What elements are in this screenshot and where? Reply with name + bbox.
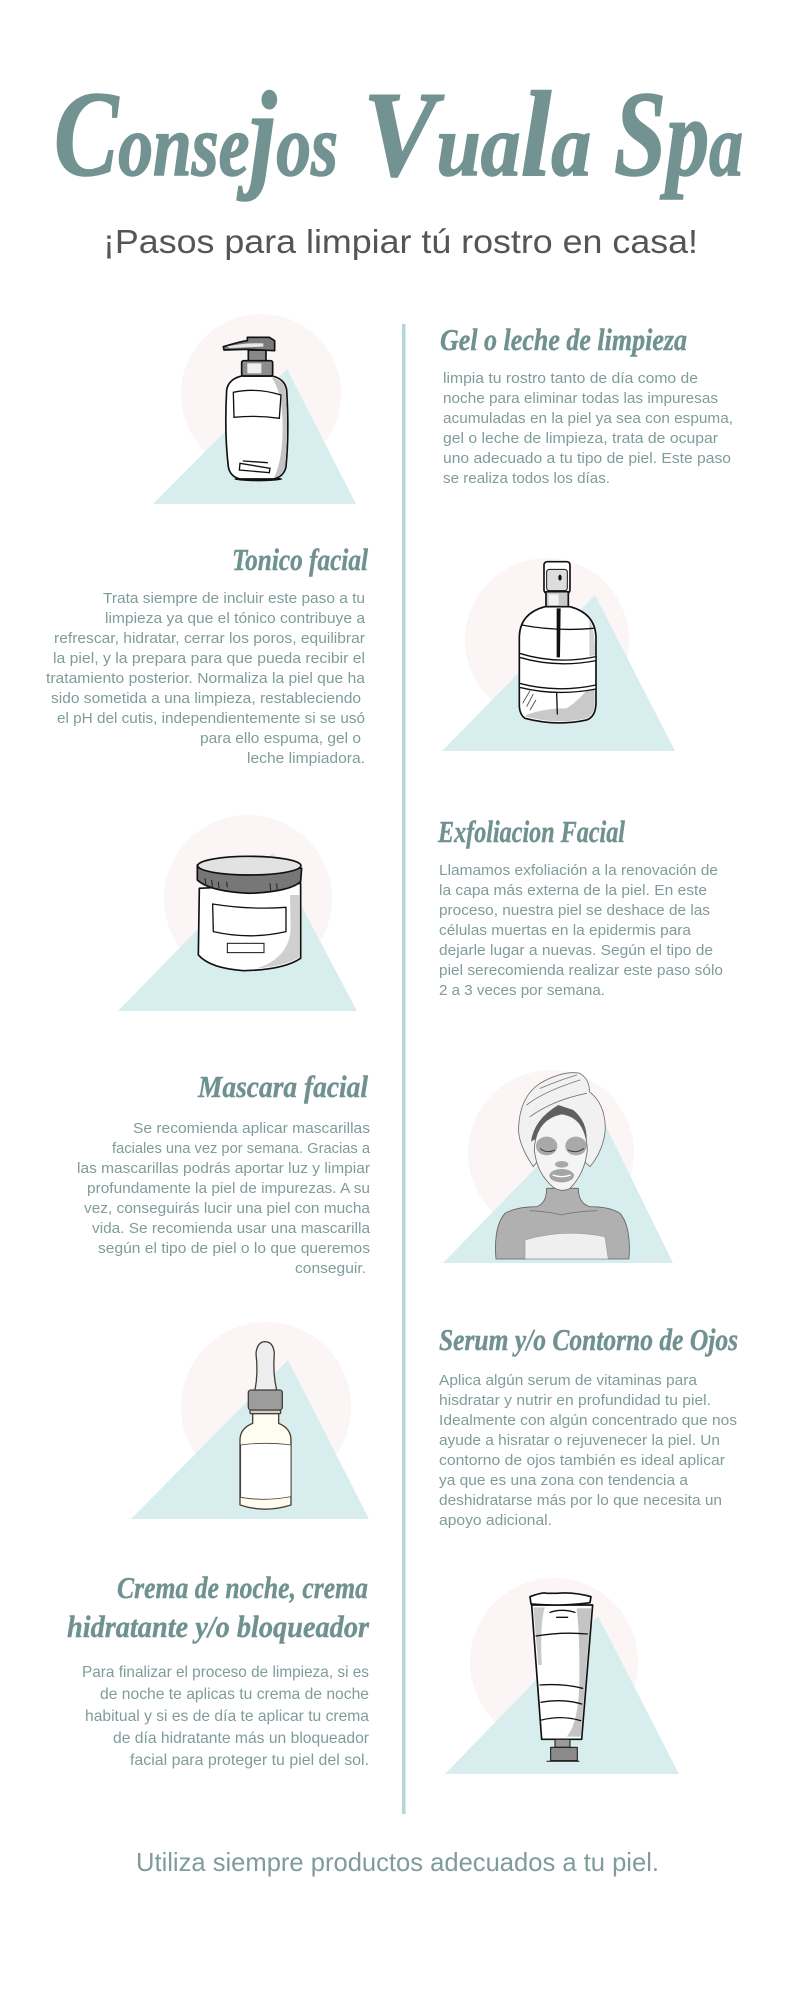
body text: para ello espuma, gel o: [200, 731, 361, 747]
body text: células muertas en la epidermis para: [439, 923, 692, 939]
body text: contorno de ojos también es ideal aplicar: [439, 1453, 725, 1469]
heading: hidratante y/o bloqueador: [67, 1609, 370, 1644]
body text: conseguir.: [295, 1261, 366, 1277]
body text: [46, 591, 366, 767]
icon: cream jar: [197, 856, 302, 971]
body text: gel o leche de limpieza, trata de ocupar: [443, 431, 718, 447]
icon: spray bottle: [519, 562, 596, 723]
body text: facial para proteger tu piel del sol.: [130, 1752, 369, 1769]
body text: uno adecuado a tu tipo de piel. Este paso: [443, 451, 731, 467]
body text: leche limpiadora.: [247, 751, 365, 767]
body text: ya que es una zona con tendencia a: [439, 1473, 689, 1489]
body text: tratamiento posterior. Normaliza la piel que ha: [46, 671, 366, 687]
icon: cream tube: [530, 1593, 593, 1761]
body text: piel serecomienda realizar este paso sólo: [439, 963, 723, 979]
body text: hisdratar y nutrir en profundidad tu piel.: [439, 1393, 711, 1409]
body text: de noche te aplicas tu crema de noche: [100, 1686, 369, 1703]
heading: Gel o leche de limpieza: [440, 322, 687, 357]
body text: acumuladas en la piel ya sea con espuma,: [443, 411, 733, 427]
closing note: Utiliza siempre productos adecuados a tu piel.: [136, 1847, 659, 1877]
body text: Idealmente con algún concentrado que nos: [439, 1413, 737, 1429]
body text: apoyo adicional.: [439, 1513, 552, 1529]
icon: pump bottle: [223, 337, 288, 481]
body text: dejarle lugar a nuevas. Según el tipo de: [439, 943, 713, 959]
body text: profundamente la piel de impurezas. A su: [87, 1181, 370, 1197]
body text: la piel, y la prepara para que pueda recibir el: [53, 651, 365, 667]
heading: Crema de noche, crema: [117, 1570, 368, 1605]
illustration: dropper bottle on circle and triangle: [131, 1322, 369, 1519]
body text: las mascarillas podrás aportar luz y limpiar: [77, 1161, 370, 1177]
icon: dropper bottle: [240, 1342, 291, 1509]
body text: ayude a hisratar o rejuvenecer la piel. Un: [439, 1433, 720, 1449]
body text: vida. Se recomienda usar una mascarilla: [92, 1221, 371, 1237]
body text: Se recomienda aplicar mascarillas: [133, 1121, 370, 1137]
illustration: spray bottle on circle and triangle: [442, 558, 675, 751]
body text: Aplica algún serum de vitaminas para: [439, 1373, 698, 1389]
illustration: jar on circle and triangle: [118, 815, 357, 1011]
body text: [82, 1664, 370, 1769]
body text: noche para eliminar todas las impuresas: [443, 391, 718, 407]
body text: la capa más externa de la piel. En este: [439, 883, 707, 899]
panel: gel o leche de limpieza: [153, 314, 733, 504]
panel: crema de noche: [67, 1570, 679, 1774]
panel: serum y/o contorno de ojos: [131, 1322, 738, 1529]
body text: Trata siempre de incluir este paso a tu: [103, 591, 365, 607]
central vertical divider line: [402, 324, 406, 1814]
title: [54, 67, 743, 202]
panel: exfoliacion facial: [118, 814, 723, 1011]
subtitle: ¡Pasos para limpiar tú rostro en casa!: [103, 223, 698, 260]
body text: se realiza todos los días.: [443, 471, 610, 487]
illustration: woman with face mask on circle and triangle: [443, 1070, 673, 1263]
title: Spa: [614, 67, 743, 202]
body text: vez, conseguirás lucir una piel con mucha: [84, 1201, 371, 1217]
body text: sido sometida a una limpieza, restableciendo: [51, 691, 361, 707]
title: Vuala: [363, 67, 591, 202]
panel: tonico facial: [46, 542, 675, 767]
body text: 2 a 3 veces por semana.: [439, 983, 605, 999]
body text: Para finalizar el proceso de limpieza, si es: [82, 1664, 369, 1681]
body text: según el tipo de piel o lo que queremos: [98, 1241, 370, 1257]
body text: proceso, nuestra piel se deshace de las: [439, 903, 710, 919]
body text: de día hidratante más un bloqueador: [113, 1730, 370, 1747]
body text: [439, 863, 723, 999]
body text: habitual y si es de día te aplicar tu crema: [85, 1708, 369, 1725]
body text: refrescar, hidratar, cerrar los poros, equilibrar: [54, 631, 365, 647]
illustration: pump bottle on circle and triangle: [153, 314, 356, 504]
body text: limpieza ya que el tónico contribuye a: [105, 611, 366, 627]
body text: limpia tu rostro tanto de día como de: [443, 371, 698, 387]
body text: el pH del cutis, independientemente si se usó: [57, 711, 365, 727]
heading: [67, 1570, 370, 1644]
title: Consejos: [54, 67, 338, 202]
body text: deshidratarse más por lo que necesita un: [439, 1493, 722, 1509]
heading: Serum y/o Contorno de Ojos: [439, 1322, 738, 1357]
illustration: tube on circle and triangle: [445, 1578, 679, 1774]
heading: Tonico facial: [232, 542, 368, 577]
body text: faciales una vez por semana. Gracias a: [112, 1141, 371, 1157]
body text: [443, 371, 733, 487]
body text: [77, 1121, 371, 1277]
heading: Exfoliacion Facial: [437, 814, 625, 849]
icon: woman with towel and face mask: [495, 1073, 629, 1259]
body text: [439, 1373, 737, 1529]
panel: mascara facial: [77, 1069, 673, 1277]
body text: Llamamos exfoliación a la renovación de: [439, 863, 718, 879]
heading: Mascara facial: [197, 1069, 368, 1104]
